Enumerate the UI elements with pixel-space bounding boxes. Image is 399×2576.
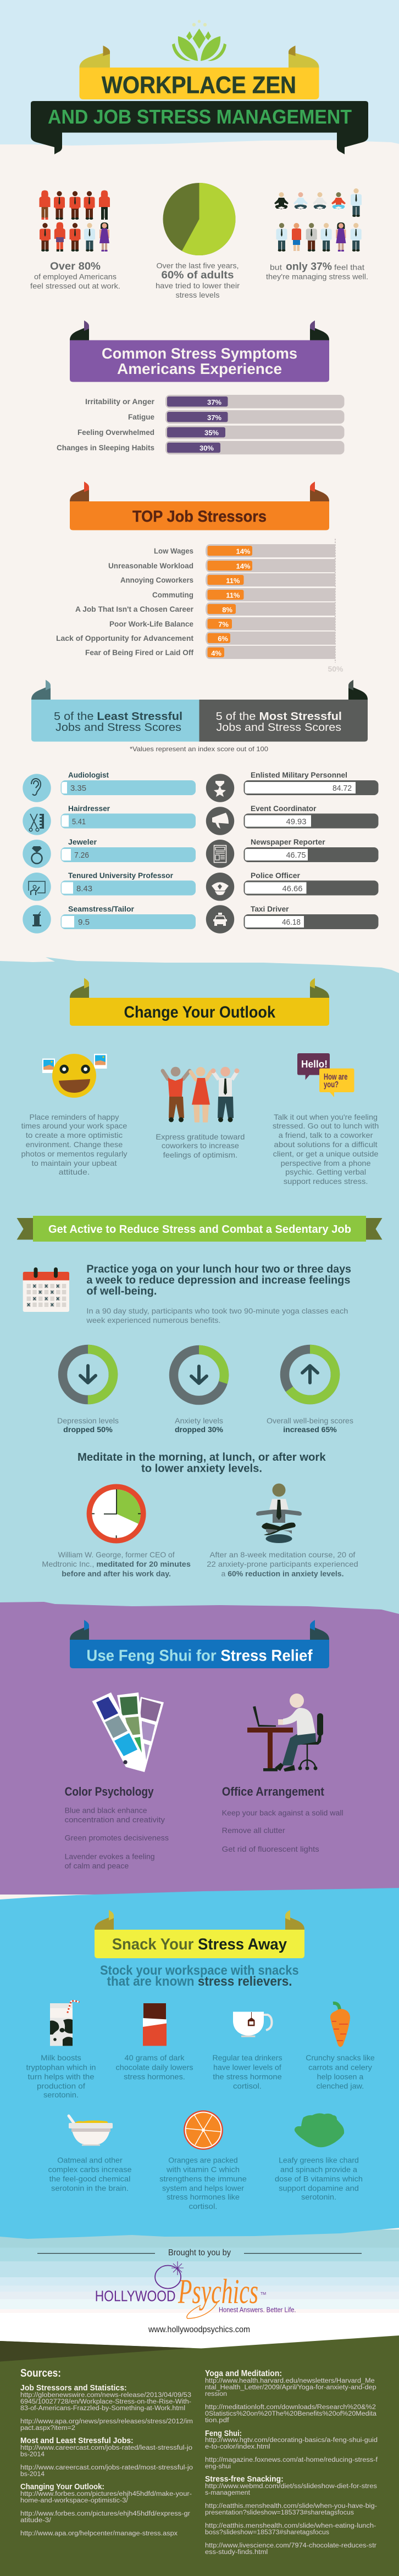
snack: oatmeal: the feel-good chemical — [49, 2174, 130, 2183]
sources column right: http://www.webmd.com/diet/ss/slideshow-diet-for-stres — [205, 2483, 377, 2490]
text: talk it out: Talk it out when you're feeling — [274, 1113, 378, 1121]
text: meditation course: a 60% reduction in anxiety levels. — [221, 1569, 344, 1578]
heading: practice yoga: a week to reduce depression and increase feelings — [86, 1274, 350, 1286]
snack: orange: Oranges are packed — [168, 2155, 238, 2164]
snack: tea: have lower levels of — [213, 2063, 281, 2071]
text: meditation course: After an 8-week meditation course, 20 of — [210, 1550, 356, 1559]
sources column right: http://www.hgtv.com/decorating-basics/a-feng-shui-guid — [205, 2437, 378, 2444]
sources column left: http://www.careercast.com/jobs-rated/least-stressful-jo — [20, 2445, 192, 2451]
text: reminders of happy times: environment. Change these — [26, 1140, 123, 1149]
sources column right: http://meditationloft.com/downloads/Research%20&%2 — [205, 2404, 376, 2411]
snack: tea: Regular tea drinkers — [212, 2053, 282, 2062]
heading ribbon: 5 of the Least Stressful — [54, 711, 182, 723]
job: event coordinator: 49.93 — [286, 817, 307, 826]
job: enlisted military: Enlisted Military Personnel — [251, 770, 347, 779]
snack: orange: strengthens the immune — [159, 2174, 247, 2183]
sources column right: http://magazine.foxnews.com/at-home/reducing-stress-f — [205, 2457, 378, 2463]
text: talk it out: client, or get a unique outside — [273, 1149, 379, 1158]
job: seamstress: 9.5 — [78, 918, 90, 927]
job: jeweler: 7.26 — [74, 851, 89, 860]
sources column left: bs-2014 — [20, 2471, 45, 2478]
panel: feng shui — [65, 1620, 343, 1870]
snack: carrot: help loosen a — [317, 2072, 364, 2081]
text: office arrangement: Keep your back against a solid wall — [222, 1808, 343, 1817]
text: reminders of happy times: photos or mementos regularly — [21, 1149, 127, 1158]
panel: change your outlook — [21, 978, 379, 1186]
panel: brought to you by — [37, 2248, 362, 2334]
heading ribbon: Snack Your Stress Away — [112, 1936, 287, 1953]
sources column left: http://globenewswire.com/news-release/2013/04/09/53 — [20, 2392, 191, 2399]
text: meditation course — [207, 1550, 358, 1578]
icon: colour swatch fan — [92, 1692, 164, 1772]
logo: Hollywood Psychics: Psychics — [178, 2272, 258, 2311]
icon: three cheering coworkers — [163, 1067, 240, 1122]
heading ribbon — [70, 321, 329, 382]
least stressful list — [23, 770, 196, 934]
sources column right: presentation?slideshow=185373#sharetagsfocus — [205, 2510, 354, 2516]
sources column left: pact.aspx?item=2 — [20, 2425, 75, 2432]
panel: get active — [16, 1216, 383, 1578]
job: newspaper reporter: Newspaper Reporter — [251, 837, 325, 846]
sources column right: http://eatthis.menshealth.com/slide/when-you-have-big- — [205, 2503, 377, 2510]
subheading: Stock your workspace with snacks — [100, 1963, 299, 1978]
text: express gratitude — [156, 1132, 245, 1159]
text: express gratitude: feelings of optimism. — [163, 1150, 237, 1159]
icon: clock — [87, 1484, 146, 1543]
text: express gratitude: coworkers to increase — [162, 1141, 239, 1150]
snack: carrot — [306, 2003, 375, 2090]
heading ribbon: Jobs and Stress Scores — [217, 722, 341, 734]
snack: orange: stress hormones like — [167, 2192, 240, 2201]
yellow ribbon: WORKPLACE ZEN — [102, 71, 296, 99]
snack: milk: production of — [37, 2081, 85, 2090]
panel: adults trying to lower stress — [156, 183, 240, 299]
logo: Hollywood Psychics: TM — [261, 2292, 266, 2296]
job: hairdresser: 5.41 — [72, 817, 86, 826]
bar chart: stressors: 11% — [226, 577, 240, 585]
statistic text: 60% of adults — [162, 270, 234, 281]
bar chart: stressors: 4% — [211, 649, 221, 657]
snack: tea: the stress hormone — [213, 2072, 282, 2081]
heading ribbon — [95, 1910, 304, 1958]
statistic text — [30, 261, 120, 290]
job: hairdresser: Hairdresser — [68, 804, 110, 813]
subheading: that are known stress relievers. — [107, 1974, 292, 1989]
snack: tea: cortisol. — [233, 2081, 262, 2090]
job: taxi driver: Taxi Driver — [251, 904, 289, 913]
icon: meditating people row — [274, 188, 362, 217]
snack: oatmeal — [48, 2116, 132, 2192]
snack: milk — [26, 2001, 96, 2099]
background: fading bands above footer — [0, 2229, 399, 2351]
text: reminders of happy times — [21, 1113, 128, 1176]
icon: speech bubbles: How are — [324, 1072, 348, 1082]
bar chart: symptoms: 37% — [207, 413, 221, 422]
sources column right: s-management — [205, 2490, 251, 2496]
snack: leafy greens — [275, 2113, 363, 2201]
logo: Hollywood Psychics: HOLLYWOOD — [95, 2288, 176, 2305]
snack: carrot: clenched jaw. — [317, 2081, 364, 2090]
chart: depression levels donut — [57, 1349, 119, 1434]
chart: well-being donut: Overall well-being scores — [267, 1416, 353, 1425]
statistic text: they're managing stress well. — [266, 272, 368, 281]
heading: practice yoga — [86, 1264, 351, 1297]
statistic text: feel that — [334, 262, 364, 271]
chart: depression levels donut: dropped 50% — [63, 1425, 113, 1434]
job: police officer — [206, 871, 378, 901]
bar chart: stressors: Annoying Coworkers — [120, 576, 193, 584]
heading: meditate: Meditate in the morning, at lunch, or after work — [77, 1451, 326, 1463]
text: color psychology: of calm and peace — [65, 1862, 129, 1870]
sources column left: Changing Your Outlook: — [20, 2483, 104, 2491]
statistic text — [266, 261, 368, 281]
background: purple section — [0, 1602, 399, 1895]
sources column right: 0Statistics%20on%20The%20Benefits%20of%20Medita — [205, 2411, 377, 2417]
text: color psychology: concentration and creativity — [65, 1815, 165, 1824]
bar chart: stressors: 14% — [236, 547, 251, 556]
text: talk it out: a friend, talk to a coworker — [279, 1131, 373, 1139]
heading ribbon: Jobs and Stress Scores — [56, 722, 181, 734]
heading ribbon — [70, 978, 329, 1026]
bar chart: stressors: 50% — [328, 664, 343, 673]
panel: snacks — [26, 1910, 375, 2210]
snack: tea — [212, 2012, 282, 2090]
panel: top job stressors — [56, 482, 343, 673]
text: talk it out — [273, 1113, 379, 1186]
text: william george: before and after his work day. — [62, 1569, 171, 1578]
panel: common stress symptoms — [57, 321, 344, 455]
statistic text: stress levels — [176, 290, 220, 299]
bar chart: symptoms: 35% — [204, 428, 219, 437]
bar chart: stressors: 7% — [218, 621, 229, 628]
heading ribbon: Americans Experience — [117, 360, 282, 377]
job: professor: Tenured University Professor — [68, 871, 174, 880]
bar chart: stressors: 6% — [218, 635, 228, 642]
sources column left: home-and-workspace-optimistic-3/ — [20, 2497, 129, 2504]
snack: orange — [159, 2110, 247, 2210]
snack: leafy greens: dose of B vitamins which — [275, 2174, 363, 2183]
heading ribbon: Use Feng Shui for Stress Relief — [86, 1647, 313, 1665]
heading ribbon: Common Stress Symptoms — [102, 345, 297, 362]
text: study summary — [86, 1306, 348, 1325]
snack: milk: turn helps with the — [27, 2072, 95, 2081]
panel: least and most stressful jobs — [23, 680, 379, 934]
statistic text: but — [270, 262, 282, 271]
snack: milk: Milk boosts — [41, 2053, 81, 2062]
bar chart: stressors: Commuting — [152, 591, 193, 599]
sources column right: http://eatthis.menshealth.com/slide/when-eating-lunch- — [205, 2523, 376, 2529]
chart: anxiety levels donut — [174, 1350, 224, 1434]
snack: milk: tryptophan which in — [26, 2063, 96, 2071]
text: william george: Medtronic Inc., meditated for 20 minutes — [42, 1560, 191, 1568]
heading ribbon — [70, 1620, 329, 1668]
text: reminders of happy times: to create a more optimistic — [26, 1131, 123, 1139]
panel: stressed employees — [30, 190, 120, 290]
text: color psychology — [65, 1785, 169, 1870]
icon: standing people row — [276, 222, 362, 252]
text: reminders of happy times: Place reminders of happy — [30, 1113, 119, 1121]
sources column right: e-to-color/index.html — [205, 2444, 270, 2450]
snack: oatmeal: Oatmeal and other — [57, 2155, 123, 2164]
bar chart: symptoms: Fatigue — [128, 413, 154, 421]
heading ribbon — [70, 482, 329, 530]
text: reminders of happy times: to maintain your upbeat — [32, 1159, 117, 1167]
bar chart: symptoms: Changes in Sleeping Habits — [57, 444, 154, 452]
job: audiologist: Audiologist — [68, 770, 109, 779]
sources column right: Stress-free Snacking: — [205, 2475, 284, 2484]
snack: carrot: carrots and celery — [308, 2063, 372, 2071]
bar chart: symptoms — [57, 395, 344, 455]
icon: office worker at desk — [247, 1694, 323, 1772]
text: talk it out: support reduces stress. — [284, 1177, 368, 1186]
job: seamstress — [23, 904, 196, 934]
text: talk it out: about solutions for a difficult — [274, 1140, 378, 1149]
job: hairdresser — [23, 804, 196, 835]
green ground — [0, 2335, 399, 2576]
panel: sources — [0, 2335, 399, 2576]
snack: leafy greens: serotonin. — [301, 2192, 336, 2201]
sources column left: 6945/10027728/en/Workplace-Stress-on-the-Rise-With- — [20, 2399, 191, 2405]
background: light blue section — [0, 957, 399, 1614]
text: color psychology: Green promotes decisiveness — [65, 1833, 169, 1842]
footnote: *Values represent an index score out of 100 — [130, 745, 268, 753]
heading ribbon — [16, 1216, 383, 1242]
bar chart: stressors: A Job That Isn't a Chosen Career — [75, 605, 194, 613]
job: police officer: Police Officer — [251, 871, 301, 880]
panel: managing stress well — [266, 188, 368, 281]
yellow ribbon — [79, 46, 319, 99]
chart: well-being donut: increased 65% — [283, 1425, 337, 1434]
bar chart: stressors: 11% — [226, 591, 240, 600]
logo: Hollywood Psychics: Honest Answers. Better Life. — [219, 2306, 296, 2314]
sources column right: ess-study-finds.html — [205, 2549, 268, 2556]
sources column left: Most and Least Stressful Jobs: — [20, 2437, 134, 2445]
job: professor: 8.43 — [76, 884, 92, 893]
bar chart: stressors: Poor Work-Life Balance — [109, 620, 193, 628]
sources column left: bs-2014 — [20, 2451, 45, 2458]
statistic text — [156, 261, 240, 299]
background: sky — [0, 0, 399, 146]
bar chart: stressors: Lack of Opportunity for Advancement — [56, 634, 194, 642]
sources column left: http://www.apa.org/news/press/releases/stress/2012/im — [20, 2418, 193, 2425]
chart: anxiety levels donut: dropped 30% — [175, 1425, 224, 1434]
statistic text: have tried to lower their — [156, 281, 240, 290]
website: www.hollywoodpsychics.com — [148, 2325, 250, 2334]
job: enlisted military: 84.72 — [332, 784, 352, 793]
text: talk it out: perspective from a phone — [281, 1159, 371, 1167]
sources column left: http://www.forbes.com/pictures/ehjh45hdfd/make-your- — [20, 2491, 192, 2497]
bar chart: symptoms: Irritability or Anger — [85, 398, 155, 406]
sources column right: http://www.livescience.com/7974-chocolate-reduces-str — [205, 2543, 376, 2549]
bar chart: symptoms: 37% — [207, 398, 221, 406]
sources column left — [20, 2367, 193, 2537]
icon: stressed people row 1 — [40, 190, 110, 220]
bar chart: stressors: Low Wages — [154, 547, 193, 555]
heading ribbon: 5 of the Most Stressful — [216, 711, 342, 723]
statistic text: only 37% — [286, 261, 332, 272]
job: event coordinator: Event Coordinator — [251, 804, 317, 813]
bar chart: stressors: 14% — [236, 562, 251, 570]
sources column left: 83-of-Americans-Frazzled-by-Something-at-Work.html — [20, 2405, 185, 2412]
sources column left: http://www.forbes.com/pictures/ehjh45hdfd/express-gr — [20, 2511, 190, 2517]
sources column left: atitude-3/ — [20, 2517, 52, 2524]
statistic text: feel stressed out at work. — [30, 281, 120, 290]
snack: chocolate: stress hormones. — [124, 2072, 185, 2081]
background: bright blue section — [0, 1888, 399, 2239]
text: study summary: week experienced numerous benefits. — [86, 1316, 220, 1325]
text: office arrangement: Office Arrangement — [222, 1785, 325, 1798]
sources column left: Job Stressors and Statistics: — [20, 2384, 127, 2393]
bar chart: stressors: 8% — [222, 606, 232, 614]
text: william george: William W. George, former CEO of — [58, 1550, 175, 1559]
heading: meditate — [77, 1451, 326, 1475]
icon: speech bubbles: Hello! — [301, 1059, 328, 1070]
sources column left: http://www.apa.org/helpcenter/manage-stress.aspx — [20, 2530, 178, 2537]
statistic text: Over 80% — [50, 261, 101, 272]
job: enlisted military — [206, 770, 378, 802]
chart: well-being donut — [267, 1349, 353, 1434]
job: audiologist — [23, 770, 196, 802]
statistic text: Over the last five years, — [156, 261, 239, 270]
subheading — [100, 1963, 299, 1989]
heading ribbon — [31, 680, 368, 741]
job: police officer: 46.66 — [282, 884, 302, 893]
heading ribbon: TOP Job Stressors — [132, 508, 267, 526]
text: talk it out: psychic. Getting verbal — [285, 1167, 366, 1176]
title banner — [31, 20, 368, 154]
job: audiologist: 3.35 — [70, 784, 86, 793]
text: express gratitude: Express gratitude toward — [156, 1132, 245, 1141]
text: office arrangement — [222, 1785, 343, 1853]
snack: orange: with vitamin C which — [166, 2165, 240, 2173]
heading ribbon: Change Your Outlook — [124, 1003, 275, 1021]
dark ribbon: AND JOB STRESS MANAGEMENT — [48, 105, 352, 128]
snack: leafy greens: Leafy greens like chard — [279, 2155, 359, 2164]
sources column right: ntal_Health_Letter/2009/April/Yoga-for-anxiety-and-dep — [205, 2384, 376, 2391]
snack: orange: cortisol. — [189, 2201, 218, 2210]
bar chart: stressors — [56, 539, 343, 673]
job: jeweler — [23, 837, 196, 868]
text: office arrangement: Remove all clutter — [222, 1826, 285, 1835]
text: meditation course: 22 anxiety-prone participants experienced — [207, 1560, 358, 1568]
chart: anxiety levels donut: Anxiety levels — [175, 1416, 223, 1425]
job: taxi driver: 46.18 — [282, 918, 301, 927]
job: event coordinator — [206, 804, 378, 835]
snack: carrot: Crunchy snacks like — [306, 2053, 375, 2062]
sources column left: Sources: — [20, 2367, 61, 2379]
snack: leafy greens: support dopamine and — [279, 2183, 359, 2192]
job: professor — [23, 871, 196, 901]
dark ground shadow — [0, 2341, 192, 2361]
job: newspaper reporter — [206, 837, 378, 868]
text: office arrangement: Get rid of fluorescent lights — [222, 1845, 319, 1853]
icon: meditating businessman — [256, 1484, 302, 1543]
sources column left: http://www.careercast.com/jobs-rated/most-stressful-jo — [20, 2465, 193, 2471]
statistic text: of employed Americans — [34, 272, 117, 281]
job: jeweler: Jeweler — [68, 837, 97, 846]
icon: lotus — [172, 20, 226, 61]
job: newspaper reporter: 46.75 — [286, 851, 306, 860]
byline with rules: Brought to you by — [168, 2248, 231, 2258]
most stressful list — [206, 770, 378, 934]
icon: speech bubbles: you? — [324, 1080, 339, 1089]
bar chart: stressors: Unreasonable Workload — [108, 562, 193, 570]
snack: leafy greens: and spinach provide a — [280, 2165, 357, 2173]
snack: oatmeal: complex carbs increase — [48, 2165, 132, 2173]
job: seamstress: Seamstress/Tailor — [68, 904, 135, 913]
snack: chocolate: chocolate daily lowers — [115, 2063, 193, 2071]
chart: pie 60 percent — [163, 183, 235, 255]
text: color psychology: Color Psychology — [65, 1785, 154, 1798]
bar chart: stressors: Fear of Being Fired or Laid Off — [85, 649, 194, 657]
bar chart: symptoms: Feeling Overwhelmed — [77, 428, 154, 437]
snack: orange: system and helps lower — [162, 2183, 244, 2192]
icon: calendar — [23, 1267, 69, 1312]
text: reminders of happy times: attitude. — [59, 1167, 90, 1176]
heading: meditate: to lower anxiety levels. — [141, 1463, 262, 1475]
chart: depression levels donut: Depression levels — [57, 1416, 119, 1425]
text: talk it out: stressed. Go out to lunch with — [273, 1121, 379, 1130]
logo: Hollywood Psychics — [95, 2261, 296, 2318]
snack: oatmeal: serotonin in the brain. — [51, 2183, 129, 2192]
heading ribbon: Get Active to Reduce Stress and Combat a Sedentary Job — [48, 1223, 351, 1236]
sources column right: ression — [205, 2391, 227, 2398]
text: color psychology: Blue and black enhance — [65, 1806, 147, 1814]
sources column right: Feng Shui: — [205, 2429, 242, 2438]
bar chart: symptoms: 30% — [199, 444, 214, 452]
snack: chocolate: 40 grams of dark — [124, 2053, 185, 2062]
dark ribbon — [31, 101, 368, 154]
text: reminders of happy times: times around your work space — [21, 1121, 128, 1130]
text: william george — [42, 1550, 191, 1578]
snack: milk: serotonin. — [43, 2090, 79, 2099]
job: taxi driver — [206, 904, 378, 934]
icon: speech bubbles — [297, 1053, 354, 1097]
heading: practice yoga: of well-being. — [86, 1285, 157, 1297]
icon: smiley with photos — [42, 1054, 107, 1098]
sources column right: http://www.health.harvard.edu/newsletters/Harvard_Me — [205, 2378, 375, 2384]
snack: chocolate — [115, 2003, 193, 2081]
heading: practice yoga: Practice yoga on your lunch hour two or three days — [86, 1264, 351, 1276]
sources column right — [205, 2369, 378, 2556]
sources column right: tion.pdf — [205, 2417, 230, 2424]
text: color psychology: Lavender evokes a feeling — [65, 1852, 155, 1860]
icon: stressed people row 2 — [40, 222, 109, 252]
sources column right: Yoga and Meditation: — [205, 2369, 282, 2378]
sources column right: boss?slideshow=185373#sharetagsfocus — [205, 2529, 329, 2536]
text: study summary: In a 90 day study, participants who took two 90-minute yoga classes each — [86, 1306, 348, 1315]
sources column right: eng-shui — [205, 2463, 231, 2470]
